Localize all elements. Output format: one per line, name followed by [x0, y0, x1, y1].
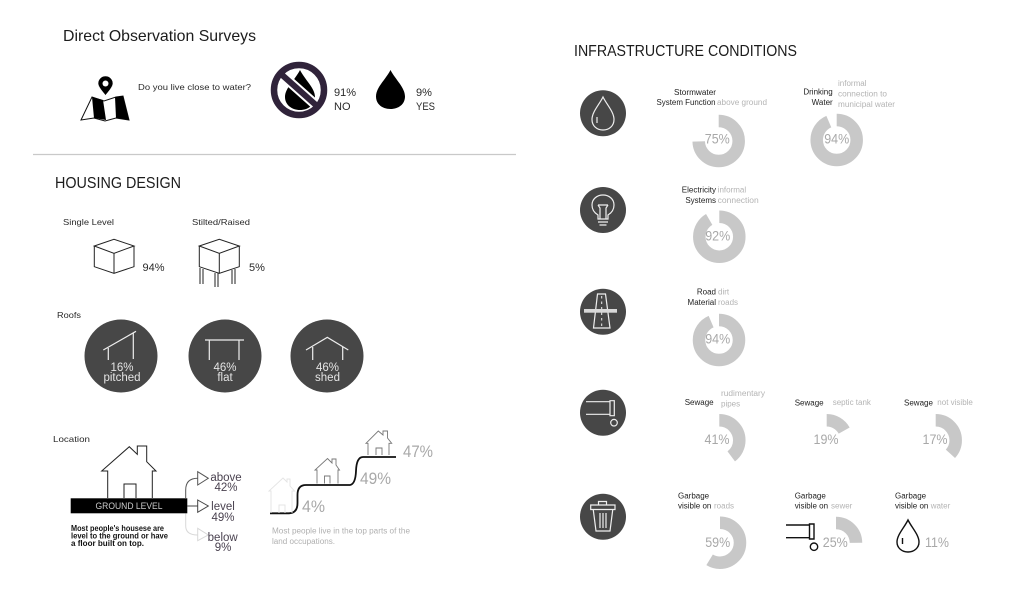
icon: house middle	[315, 458, 340, 484]
label: single level: Single Level	[63, 217, 114, 227]
stat: 9% yes: 9%	[416, 87, 432, 99]
ground level bar	[71, 498, 187, 513]
stat: 5% stilted: 5%	[249, 262, 265, 274]
label: informal connection: connection	[718, 196, 759, 205]
label: electricity systems: Systems	[685, 196, 716, 205]
label: location: Location	[53, 434, 90, 444]
label: sewage septic tank: septic tank	[833, 398, 872, 407]
label: drinking water	[803, 88, 833, 107]
icon: light bulb circle	[580, 187, 626, 233]
stat: 91% no: 91%	[334, 87, 356, 99]
stat: above 42%: 42%	[214, 482, 238, 494]
label: sewage rudimentary pipes	[685, 389, 765, 409]
label: stormwater system function	[656, 88, 716, 107]
label: sewage rudimentary pipes: pipes	[721, 400, 740, 409]
donut: stormwater 75%	[699, 121, 739, 161]
stat: level 49%: 49%	[211, 512, 235, 524]
label: garbage visible on roads: visible on	[678, 501, 711, 510]
label: sewage rudimentary pipes: rudimentary	[721, 389, 765, 398]
stat: below 9%	[208, 532, 238, 554]
text: top parts caption	[272, 526, 411, 546]
panel: shed roof	[290, 320, 364, 392]
label: stormwater system function: System Function	[656, 98, 716, 107]
donut: road 94%	[699, 320, 739, 360]
donut: drinking water 94%: 94%	[824, 132, 849, 146]
donut: garbage sewer 25%: 25%	[823, 535, 848, 550]
stat: 9% yes	[416, 87, 435, 113]
label: above ground: above ground	[717, 98, 767, 107]
label: drinking water: Drinking	[803, 88, 833, 97]
stat: below 9%: 9%	[215, 542, 231, 554]
label: garbage visible on sewer: sewer	[831, 501, 853, 510]
label: roofs: Roofs	[57, 310, 81, 320]
donut: sewage 19%: 19%	[814, 432, 838, 447]
panel: shed roof: shed	[315, 372, 340, 384]
icon: sewer pipe	[786, 524, 818, 550]
donut: sewage 17%: 17%	[922, 432, 948, 447]
icon: road circle	[580, 289, 626, 335]
stair slope line	[270, 457, 396, 513]
donut: electricity 92%: 92%	[705, 228, 730, 244]
label: drinking water: Water	[812, 98, 833, 107]
label: road material: Material	[688, 298, 716, 307]
label: road material	[688, 288, 716, 307]
icon: map with pin	[81, 76, 129, 121]
stat: 4%: 4%	[302, 497, 325, 516]
label: garbage visible on sewer: Garbage	[795, 491, 826, 500]
arrow: below	[186, 514, 208, 541]
label: dirt roads	[718, 288, 738, 307]
label: garbage visible on roads	[678, 491, 734, 510]
text: top parts caption: Most people live in the top parts of the	[272, 526, 411, 536]
icon: single level cube	[94, 239, 134, 273]
text: most people's houses	[71, 524, 169, 548]
label: informal connection to municipal water: municipal water	[838, 100, 895, 109]
label: garbage visible on sewer	[795, 491, 853, 510]
stat: garbage water 11%: 11%	[925, 535, 949, 550]
text: most people's houses: Most people's housese are	[71, 524, 164, 533]
question text: Do you live close to water?	[138, 82, 251, 92]
panel: pitched roof: pitched	[103, 372, 141, 384]
label: dirt roads: dirt	[718, 288, 730, 297]
stat: 49%: 49%	[360, 469, 391, 488]
label: stormwater system function: Stormwater	[674, 88, 716, 97]
stat: level 49%: level	[211, 501, 235, 513]
donut: sewage 41%: 41%	[704, 432, 730, 447]
label: garbage visible on roads: Garbage	[678, 491, 710, 500]
panel: pitched roof: 16%	[110, 362, 134, 374]
icon: no water sign	[274, 65, 324, 115]
icon: house high	[366, 431, 392, 455]
stat: 9% yes: YES	[416, 101, 435, 113]
panel: flat roof: 46%	[213, 362, 237, 374]
donut: stormwater 75%: 75%	[705, 132, 730, 146]
label: informal connection to municipal water: informal	[838, 79, 867, 88]
panel: pitched roof	[84, 320, 158, 392]
stat: 91% no: NO	[334, 101, 351, 113]
arrow: level	[187, 500, 208, 512]
heading: infrastructure conditions: INFRASTRUCTURE CONDITIONS	[574, 43, 797, 60]
panel: flat roof	[188, 320, 262, 392]
donut: garbage sewer 25%	[816, 523, 856, 563]
donut: road 94%: 94%	[705, 332, 730, 346]
stat: below 9%: below	[208, 532, 238, 544]
label: sewage not visible: Sewage	[904, 398, 933, 408]
text: most people's houses: a floor built on top.	[71, 539, 144, 548]
label: road material: Road	[697, 288, 716, 297]
label: electricity systems: Electricity	[682, 186, 716, 195]
label: sewage rudimentary pipes: Sewage	[685, 398, 714, 407]
stat: level 49%	[211, 501, 235, 524]
panel: shed roof: 46%	[316, 362, 339, 374]
label: sewage not visible: not visible	[937, 398, 973, 407]
icon: house on ground	[102, 446, 156, 498]
icon: house low	[269, 478, 294, 513]
icon: outline water drop	[897, 520, 919, 552]
stat: 47%: 47%	[403, 442, 433, 461]
label: sewage not visible	[904, 398, 973, 408]
text: most people's houses: level to the ground or have	[71, 532, 169, 540]
label: stilted raised: Stilted/Raised	[192, 217, 250, 227]
donut: sewage 19%	[807, 420, 847, 460]
label: informal connection to municipal water	[838, 79, 895, 109]
donut: sewage 17%	[916, 420, 956, 460]
label: informal connection: informal	[718, 186, 746, 195]
stat: 94% single level: 94%	[142, 262, 165, 274]
icon: sewage circle	[580, 390, 626, 436]
stat: above 42%	[210, 472, 242, 494]
label: informal connection	[718, 186, 759, 205]
donut: electricity 92%	[699, 217, 739, 257]
text: top parts caption: land occupations.	[272, 537, 335, 546]
donut: sewage 41%	[699, 420, 739, 460]
heading: housing design: HOUSING DESIGN	[55, 175, 181, 192]
label: garbage visible on sewer: visible on	[795, 501, 828, 510]
label: garbage visible on roads: roads	[714, 501, 734, 510]
label: sewage septic tank	[795, 398, 872, 408]
label: dirt roads: roads	[718, 298, 738, 307]
donut: drinking water 94%	[817, 120, 857, 160]
ground level bar: GROUND LEVEL	[96, 501, 162, 512]
icon: water circle	[580, 90, 626, 136]
panel: flat roof: flat	[217, 372, 233, 384]
stat: 91% no	[334, 87, 356, 113]
title: direct observation surveys: Direct Observation Surveys	[63, 28, 256, 45]
icon: stilted cube	[199, 239, 239, 287]
label: garbage visible on water	[895, 491, 951, 510]
label: electricity systems	[682, 186, 716, 205]
label: garbage visible on water: water	[930, 501, 951, 510]
label: garbage visible on water: visible on	[895, 501, 928, 510]
icon: water drop	[376, 70, 405, 109]
donut: garbage roads 59%	[700, 523, 740, 563]
donut: garbage roads 59%: 59%	[705, 535, 730, 550]
stat: above 42%: above	[210, 472, 242, 484]
label: sewage septic tank: Sewage	[795, 398, 824, 408]
icon: trash circle	[580, 494, 626, 540]
label: informal connection to municipal water: connection to	[838, 90, 888, 99]
arrow: above	[186, 472, 208, 498]
label: garbage visible on water: Garbage	[895, 491, 927, 500]
